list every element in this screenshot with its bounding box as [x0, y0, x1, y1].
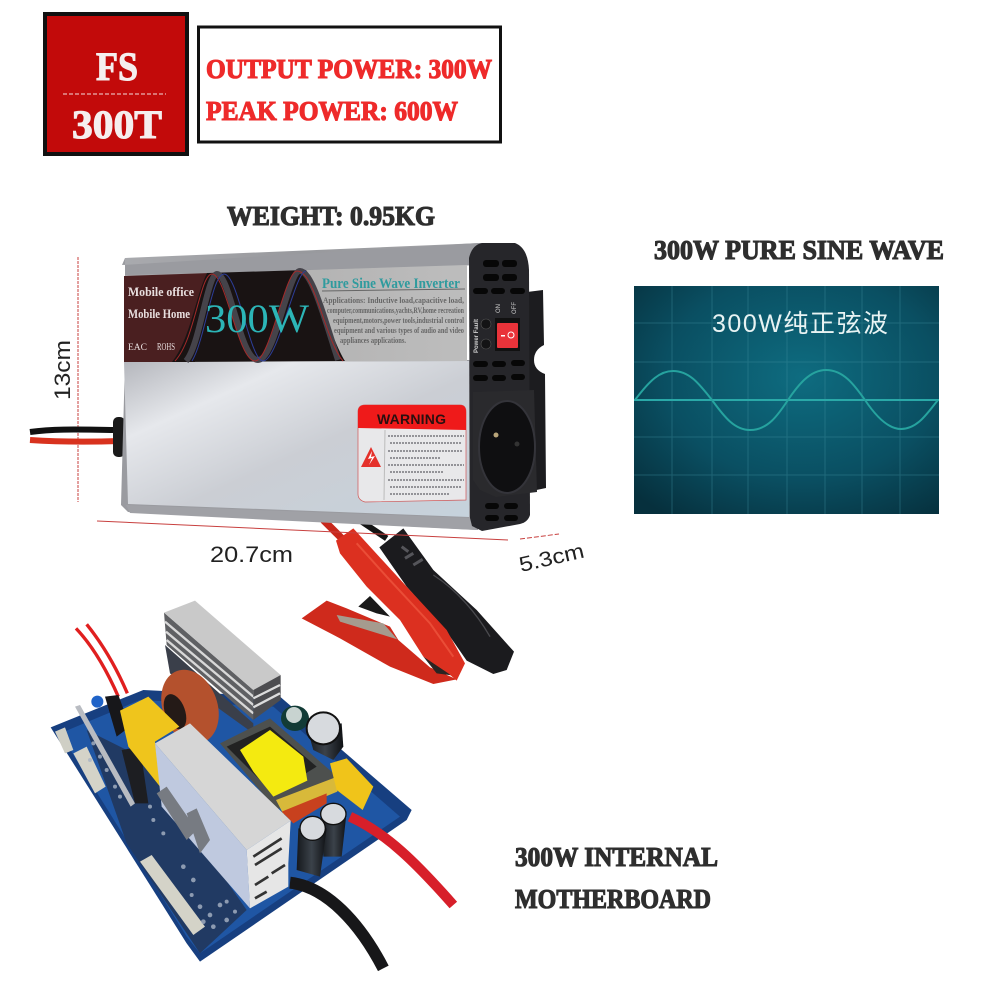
warning label	[358, 405, 466, 502]
circuit board	[51, 690, 412, 962]
peak power: PEAK POWER: 600W	[206, 96, 458, 126]
orange toroid	[151, 662, 229, 752]
vents	[473, 260, 525, 521]
front face	[121, 243, 482, 530]
indicator lights	[481, 319, 491, 329]
component area	[87, 730, 247, 953]
label band: equipment,motors,power tools,industrial control	[333, 316, 465, 325]
motherboard caption: MOTHERBOARD	[515, 884, 711, 914]
label band: equipment and various types of audio and video	[334, 326, 464, 335]
silver edge strips	[140, 855, 205, 935]
yellow box capacitor	[330, 758, 373, 810]
label band	[124, 265, 467, 362]
dimension: length	[97, 521, 508, 567]
label band: Mobile Home	[128, 306, 190, 321]
mounting bracket	[527, 290, 546, 492]
yellow capacitor left	[120, 697, 179, 787]
dimension: depth: 5.3cm	[517, 540, 586, 577]
inverter product photo	[121, 243, 546, 531]
panel labels: OFF	[512, 302, 518, 314]
transformer	[220, 718, 337, 814]
solder area	[88, 741, 237, 929]
panel labels: Power Fault	[474, 319, 480, 353]
sine wave heading: 300W PURE SINE WAVE	[654, 235, 944, 265]
icon: black clamp	[358, 528, 514, 674]
EU socket	[473, 390, 537, 497]
panel labels: ON	[496, 304, 502, 313]
capacitors bottom	[297, 803, 347, 877]
panel labels	[474, 302, 518, 353]
output power: OUTPUT POWER: 300W	[206, 54, 492, 84]
model name FS: FS	[96, 44, 138, 89]
main red cable	[350, 817, 453, 905]
label band: Pure Sine Wave Inverter	[322, 276, 460, 292]
motherboard caption: 300W INTERNAL	[515, 842, 718, 872]
dimension: height: 13cm	[50, 340, 75, 400]
power specification box	[198, 27, 500, 142]
label band: ROHS	[157, 342, 175, 353]
weight label: WEIGHT: 0.95KG	[227, 201, 435, 231]
warning label: WARNING	[377, 411, 446, 427]
back heat sink	[164, 601, 281, 733]
model number 300T: 300T	[72, 102, 162, 147]
motherboard caption	[515, 842, 718, 914]
dimension: length: 20.7cm	[210, 542, 293, 567]
band text: Mobile office	[128, 284, 194, 299]
label band: Applications: Inductive load,capacitive load,	[323, 296, 464, 305]
blue trimmer	[91, 696, 103, 708]
internal motherboard photo	[51, 601, 453, 968]
scope caption: 300W纯正弦波	[712, 310, 888, 338]
end panel	[469, 243, 530, 531]
fuse	[282, 793, 327, 823]
clip cables and clamps	[302, 520, 514, 684]
label band: 300W	[205, 296, 309, 341]
label band: EAC	[128, 342, 147, 352]
top edge	[125, 243, 482, 276]
label band: computer,communications,yachts,RV,home recreation	[327, 306, 464, 315]
panel: sine wave oscilloscope	[634, 286, 939, 514]
icon: red clamp	[302, 528, 465, 684]
power cables left	[30, 417, 125, 457]
main black cable	[290, 883, 383, 968]
label band: appliances applications.	[340, 336, 406, 345]
cables	[323, 520, 342, 538]
red rocker switch	[495, 318, 520, 351]
front heat sink	[155, 723, 291, 908]
model badge	[45, 14, 187, 154]
capacitors top	[281, 706, 343, 760]
thin red wires	[76, 624, 127, 697]
